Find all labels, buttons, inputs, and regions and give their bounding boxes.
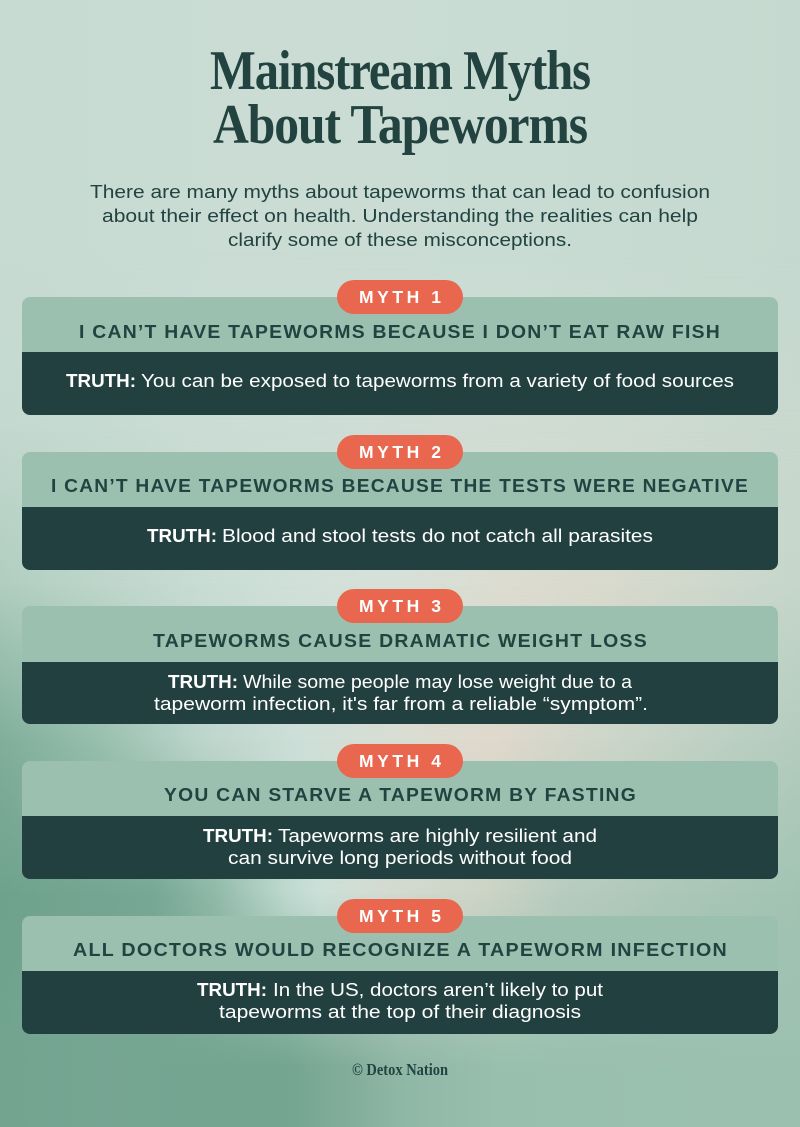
panel: myth 1: [22, 280, 778, 415]
myth 3 truth band: [22, 662, 778, 724]
myth 2 badge: [337, 435, 463, 469]
panel: myth 5: [22, 899, 778, 1034]
myth 4 truth: TRUTH:: [203, 826, 273, 846]
myth 2 truth: Blood and stool tests do not catch all parasites: [222, 526, 653, 546]
myth 4 header band: [22, 761, 778, 816]
myth 4 truth: [203, 826, 597, 868]
myth 4 heading: YOU CAN STARVE A TAPEWORM BY FASTING: [164, 784, 637, 805]
title: [210, 40, 590, 156]
myth 5 truth: [197, 980, 603, 1022]
myth 5 truth: In the US, doctors aren’t likely to put: [273, 980, 603, 1000]
myth 1 truth: TRUTH:: [66, 371, 136, 391]
myth 2 truth: TRUTH:: [147, 526, 217, 546]
myth 2 badge: MYTH 2: [359, 442, 441, 462]
myth 4 truth: Tapeworms are highly resilient and: [278, 826, 597, 846]
myth 3 truth: TRUTH:: [168, 672, 238, 692]
myth 1 truth: You can be exposed to tapeworms from a variety of food sources: [141, 371, 734, 391]
intro paragraph: [90, 182, 710, 250]
myth 3 truth: tapeworm infection, it's far from a reliable “symptom”.: [154, 694, 648, 714]
myth 2 header band: [22, 452, 778, 507]
myth 4 truth: can survive long periods without food: [228, 848, 572, 868]
panel: myth 4: [22, 744, 778, 879]
myth 3 truth: [154, 672, 648, 714]
myth 4 truth band: [22, 816, 778, 879]
myth 4 badge: [337, 744, 463, 778]
myth 3 header band: [22, 606, 778, 662]
intro paragraph: about their effect on health. Understanding the realities can help: [102, 206, 698, 226]
myth 5 badge: [337, 899, 463, 933]
myth 5 truth band: [22, 971, 778, 1034]
myth 2 truth band: [22, 507, 778, 570]
myth 1 header band: [22, 297, 778, 352]
myth 3 badge: MYTH 3: [359, 596, 441, 616]
myth 3 badge: [337, 589, 463, 623]
panel: myth 3: [22, 589, 778, 724]
intro paragraph: clarify some of these misconceptions.: [228, 230, 572, 250]
myth 1 badge: [337, 280, 463, 314]
background gradient: [0, 445, 800, 1127]
myth 1 truth band: [22, 352, 778, 415]
myth 1 heading: I CAN’T HAVE TAPEWORMS BECAUSE I DON’T EAT RAW FISH: [79, 321, 721, 342]
panel: myth 2: [22, 435, 778, 570]
myth 3 heading: TAPEWORMS CAUSE DRAMATIC WEIGHT LOSS: [153, 630, 648, 651]
myth 1 badge: MYTH 1: [359, 287, 441, 307]
title: Mainstream Myths: [210, 40, 590, 102]
myth 5 badge: MYTH 5: [359, 906, 441, 926]
myth 4 badge: MYTH 4: [359, 751, 441, 771]
intro paragraph: There are many myths about tapeworms that can lead to confusion: [90, 182, 710, 202]
myth 5 header band: [22, 916, 778, 971]
myth 5 truth: tapeworms at the top of their diagnosis: [219, 1002, 581, 1022]
myth 5 heading: ALL DOCTORS WOULD RECOGNIZE A TAPEWORM INFECTION: [73, 939, 728, 960]
myth 3 truth: While some people may lose weight due to a: [243, 672, 633, 692]
myth 2 heading: I CAN’T HAVE TAPEWORMS BECAUSE THE TESTS WERE NEGATIVE: [51, 475, 749, 496]
myth 5 truth: TRUTH:: [197, 980, 267, 1000]
footer credit: © Detox Nation: [352, 1060, 448, 1079]
title: About Tapeworms: [213, 94, 587, 156]
